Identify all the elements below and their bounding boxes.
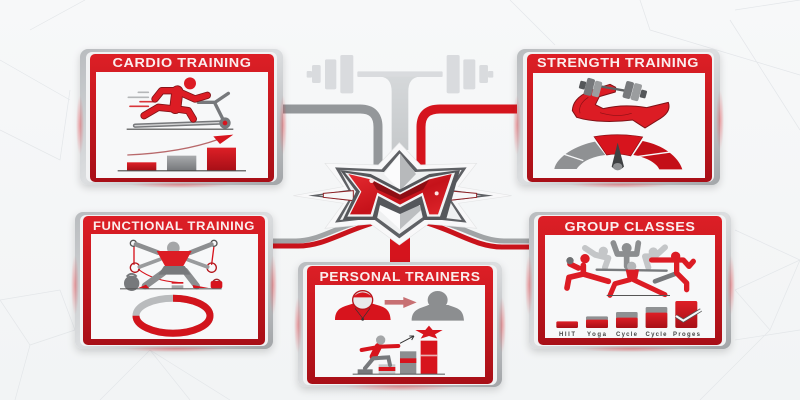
- chart: intensity gauge: [554, 135, 682, 170]
- icon: runner on treadmill: [127, 77, 233, 130]
- connector: cardio to hub: [283, 109, 378, 170]
- icon: athlete with resistance bands: [120, 240, 222, 291]
- glow accents: [71, 90, 735, 391]
- heading: cardio training: CARDIO TRAINING: [112, 56, 252, 70]
- connector: personal trainers to hub: [390, 225, 410, 265]
- panel: functional training: [75, 212, 273, 349]
- panel: group classes: Cycle: [646, 332, 667, 338]
- panel: group classes: HIIT: [559, 332, 575, 338]
- chart: rising bars with arrow: [118, 135, 246, 171]
- heading: strength training: STRENGTH TRAINING: [537, 56, 699, 70]
- panel: personal trainers: [298, 262, 502, 387]
- panel: group classes: Proges: [673, 332, 701, 338]
- connector: strength to hub: [421, 109, 517, 170]
- icon: climbing steps to a star: [353, 326, 445, 375]
- icon: trainer and client: [335, 291, 464, 321]
- chart: class bars with labels: [556, 301, 701, 328]
- connector: functional to hub: [273, 218, 380, 246]
- central M star logo: [293, 143, 512, 245]
- dumbbell watermark: [307, 55, 493, 150]
- icon: flexed arm with dumbbell: [572, 76, 669, 128]
- panel: cardio training: [80, 49, 283, 185]
- connector: group classes to hub: [420, 218, 529, 247]
- panel: group classes: [529, 212, 731, 349]
- icon: group of exercising figures: [566, 243, 693, 296]
- heading: functional training: FUNCTIONAL TRAINING: [93, 221, 255, 233]
- heading: group classes: GROUP CLASSES: [564, 220, 696, 234]
- chart: progress ring: [136, 298, 210, 333]
- panel: group classes: Yoga: [587, 332, 607, 338]
- panel: strength training: [517, 49, 720, 185]
- heading: personal trainers: PERSONAL TRAINERS: [320, 270, 480, 284]
- panel: group classes: Cycle: [616, 332, 638, 338]
